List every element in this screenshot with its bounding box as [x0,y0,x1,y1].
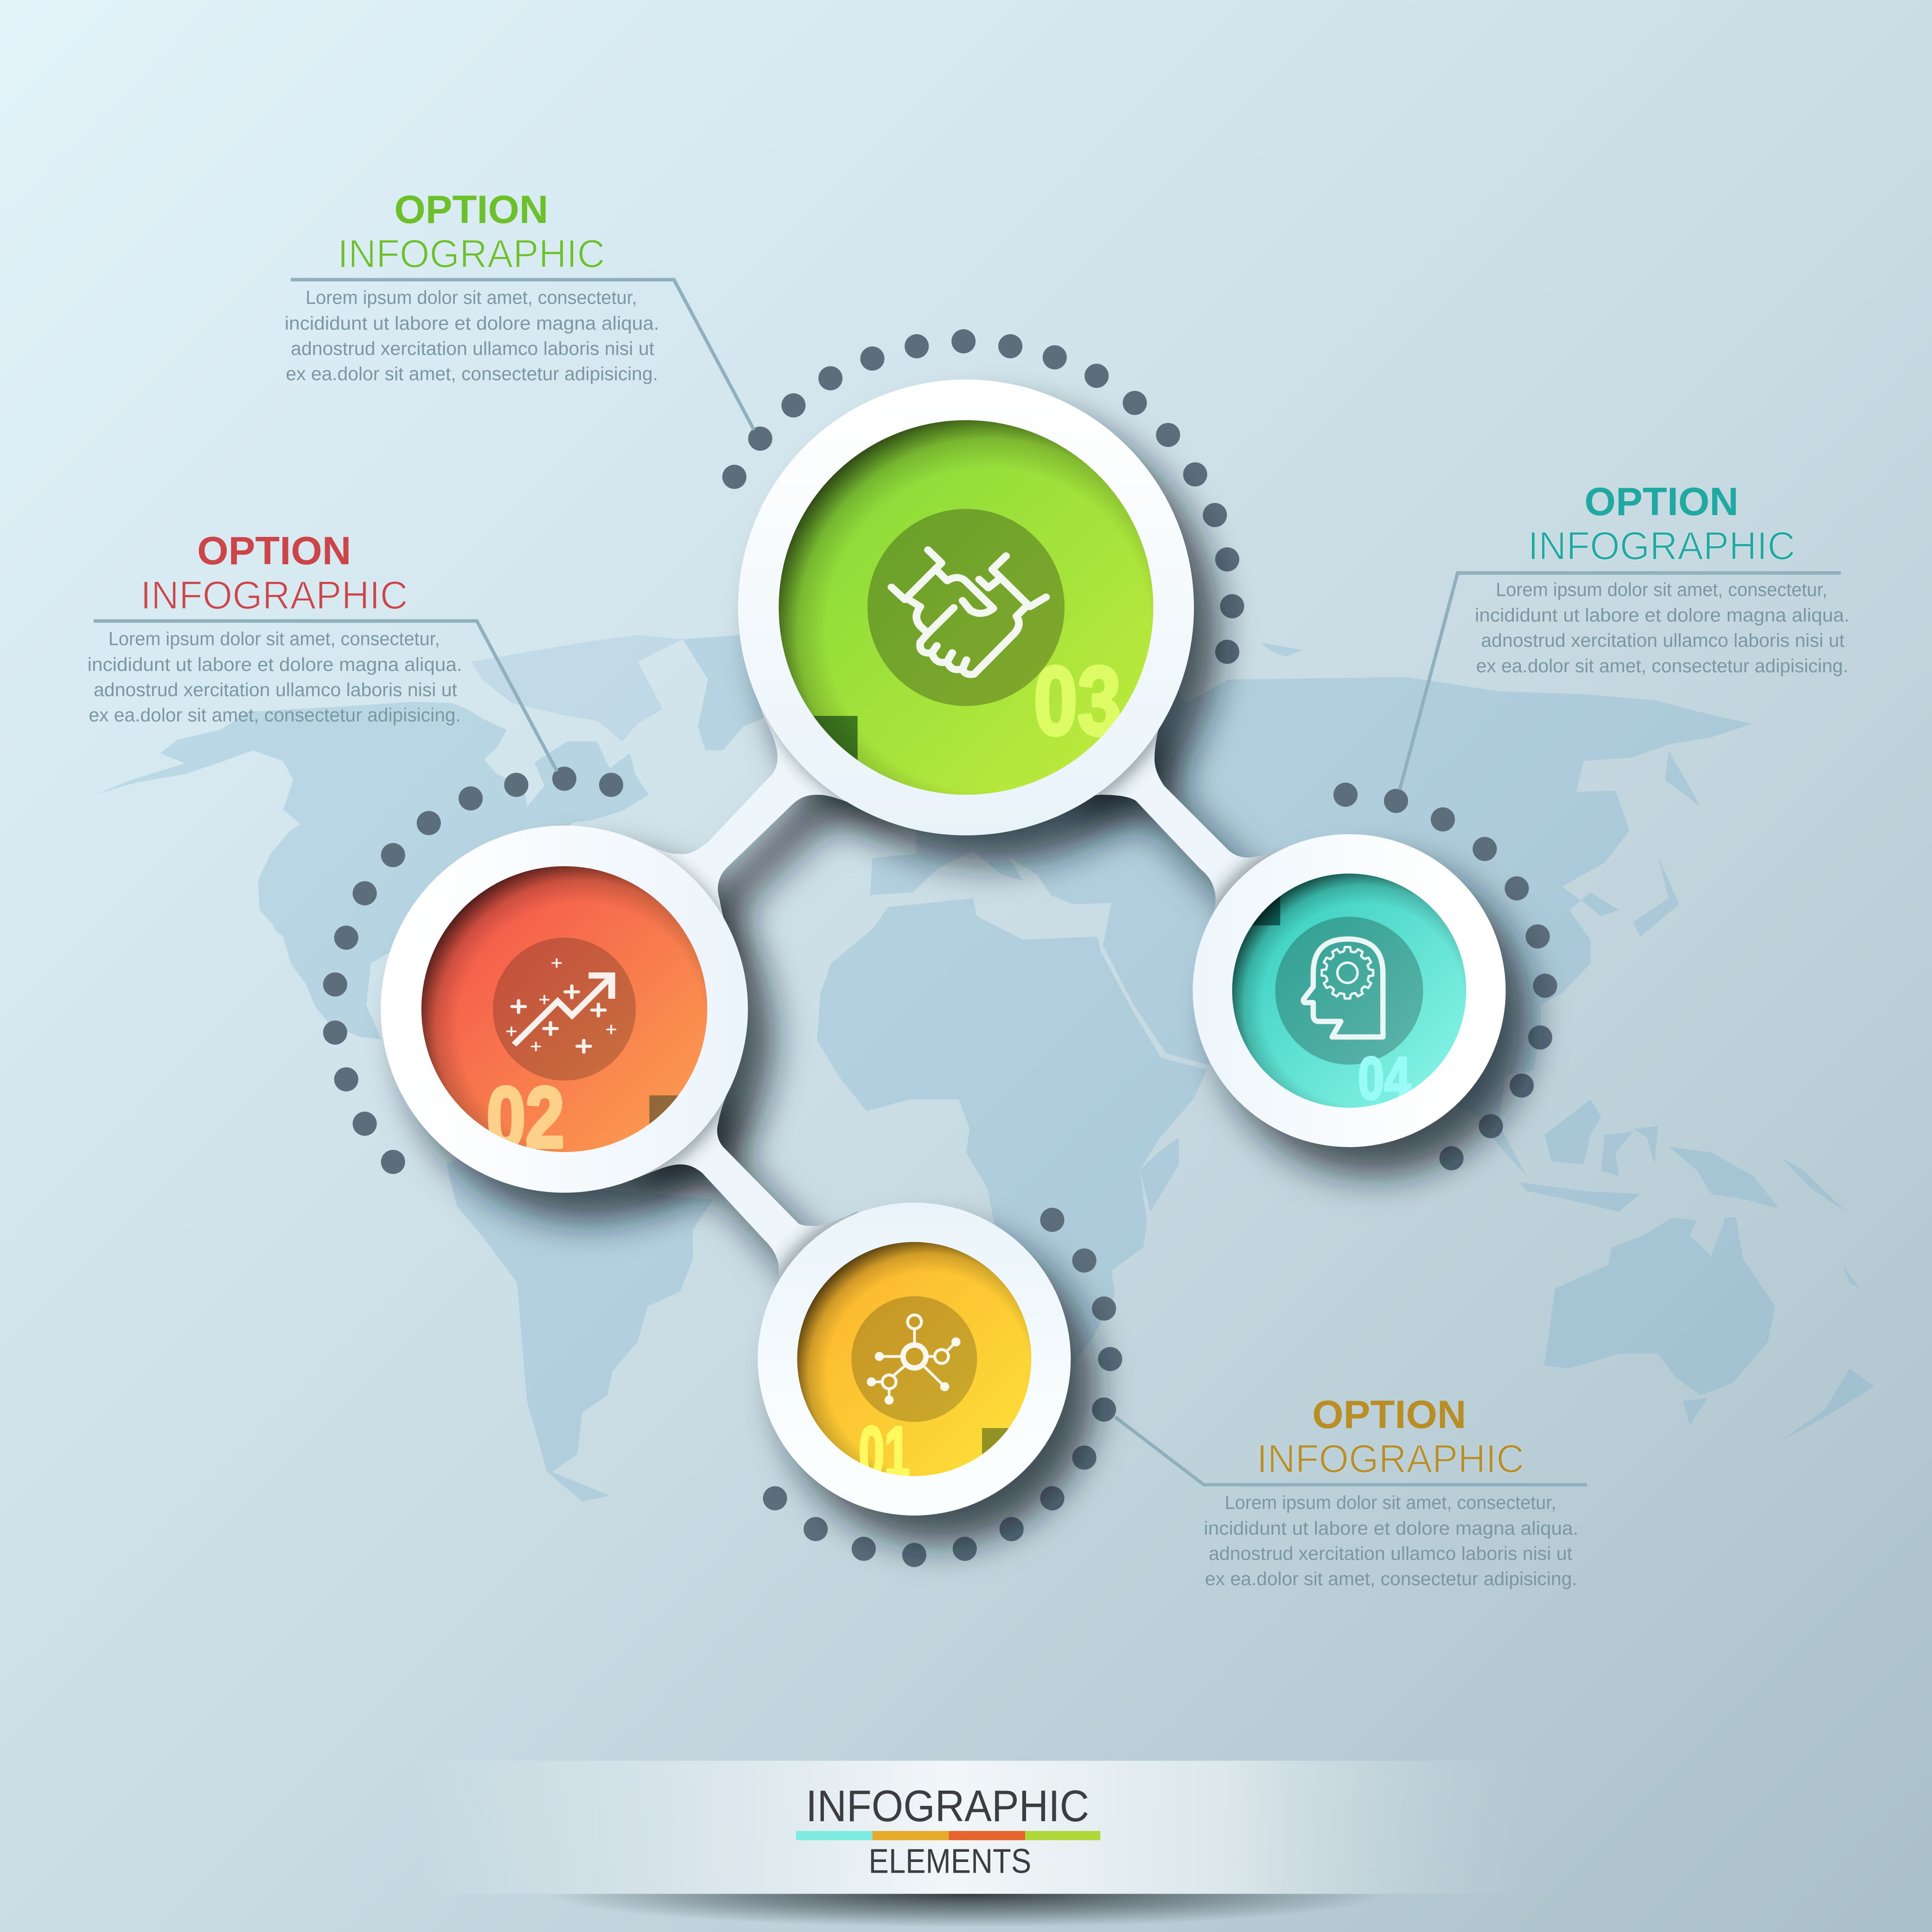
body text: Lorem ipsum dolor sit amet, consectetur, [1496,579,1827,600]
dots around option 04 [1333,783,1557,1170]
subheading: INFOGRAPHIC [338,232,605,276]
leader line [1115,1417,1587,1485]
white ring [758,1203,1071,1516]
body text: adnostrud xercitation ullamco laboris nisi ut [94,679,457,701]
colour bar [796,1831,1100,1840]
icon disc [1275,917,1423,1065]
map: new zealand [1779,1265,1875,1442]
body text: adnostrud xercitation ullamco laboris nisi ut [291,338,655,359]
body text [285,287,659,384]
heading: OPTION [394,188,548,232]
ring shadows on connector arms [636,698,1285,1285]
inner shading [797,1242,1031,1476]
colour well [797,1242,1031,1476]
callout: red option [88,529,557,772]
panel: option 02 [381,826,748,1192]
body text: incididunt ut labore et dolore magna aliqua. [1204,1518,1578,1539]
body text: ex ea.dolor sit amet, consectetur adipisicing. [1476,655,1848,676]
subheading: INFOGRAPHIC [1257,1437,1524,1481]
map: south america [446,1155,713,1501]
dots around option 01 [763,1208,1122,1567]
body text: Lorem ipsum dolor sit amet, consectetur, [1225,1492,1556,1513]
body text [1204,1492,1578,1589]
colour well [779,420,1153,795]
white ring [381,826,748,1192]
callout: green option [285,188,754,430]
panel: option 01 [758,1203,1071,1516]
leader line [291,280,754,430]
leader line [1400,573,1841,790]
icon: handshake [892,550,1046,675]
panel: option 04 [1192,834,1505,1147]
heading: OPTION [1312,1393,1466,1437]
corner square [813,716,858,760]
icon: network nodes [867,1315,961,1405]
map: arctic russian island [1261,643,1303,657]
map: africa [817,898,1207,1365]
body text: incididunt ut labore et dolore magna aliqua. [1475,605,1849,626]
body text: incididunt ut labore et dolore magna aliqua. [88,654,462,675]
body text: ex ea.dolor sit amet, consectetur adipisicing. [286,363,658,384]
inner shading [779,420,1153,795]
banner title: INFOGRAPHIC [806,1781,1089,1831]
dots around option 02 [323,767,623,1174]
body text [1475,579,1849,676]
dots around option 03 [722,329,1244,664]
number: 04 [1358,1045,1411,1112]
inner shading [1232,874,1466,1108]
corner square [1226,862,1280,925]
number: 02 [487,1070,564,1166]
arm: option 03 to option 04 [1047,708,1294,937]
banner strip [418,1761,1530,1894]
icon: rising arrow [507,959,615,1052]
map: south east asia islands [1519,1099,1846,1211]
map: greenland [683,635,771,750]
inner shading [421,866,707,1152]
drop shadow of connected rings [405,408,1530,1544]
bottom banner [418,1761,1530,1927]
icon disc [851,1296,977,1422]
corner square [982,1428,1031,1484]
map: arctic islands [472,635,683,741]
arm: option 02 to option 01 [616,1082,862,1331]
body text: adnostrud xercitation ullamco laboris nisi ut [1481,630,1845,651]
body text: ex ea.dolor sit amet, consectetur adipisicing. [1205,1568,1577,1589]
map: north america [95,702,649,1039]
callout: teal option [1400,480,1849,790]
white ring [1192,834,1505,1147]
map: australia [1544,1218,1775,1425]
leader line [94,621,557,772]
number: 01 [859,1412,910,1493]
icon disc [493,937,636,1081]
white ring [738,380,1194,835]
body text: incididunt ut labore et dolore magna aliqua. [285,312,659,334]
heading: OPTION [197,529,351,573]
subheading: INFOGRAPHIC [1528,524,1795,568]
connector arms [616,684,1294,1331]
banner subtitle: ELEMENTS [869,1842,1031,1880]
map: japan and kamchatka [1633,750,1701,937]
corner square [650,1096,711,1157]
body text: Lorem ipsum dolor sit amet, consectetur, [108,628,440,650]
number: 03 [1034,647,1121,755]
map: eurasia [870,662,1753,1176]
dotted arcs [323,329,1557,1567]
arm: option 02 to option 03 [616,684,912,941]
heading: OPTION [1585,480,1739,524]
colour well [421,866,707,1152]
icon disc [867,509,1065,706]
panel: option 03 [738,380,1194,835]
icon: head with gear [1303,939,1383,1037]
colour well [1232,874,1466,1108]
callout: yellow option [1115,1393,1587,1589]
banner shadow [548,1861,1386,1927]
body text: Lorem ipsum dolor sit amet, consectetur, [306,287,637,308]
map: madagascar [1140,1138,1179,1211]
body text: adnostrud xercitation ullamco laboris nisi ut [1209,1543,1573,1564]
body text: ex ea.dolor sit amet, consectetur adipisicing. [89,704,461,726]
body text [88,628,462,726]
world map [95,635,1875,1501]
subheading: INFOGRAPHIC [140,574,408,618]
